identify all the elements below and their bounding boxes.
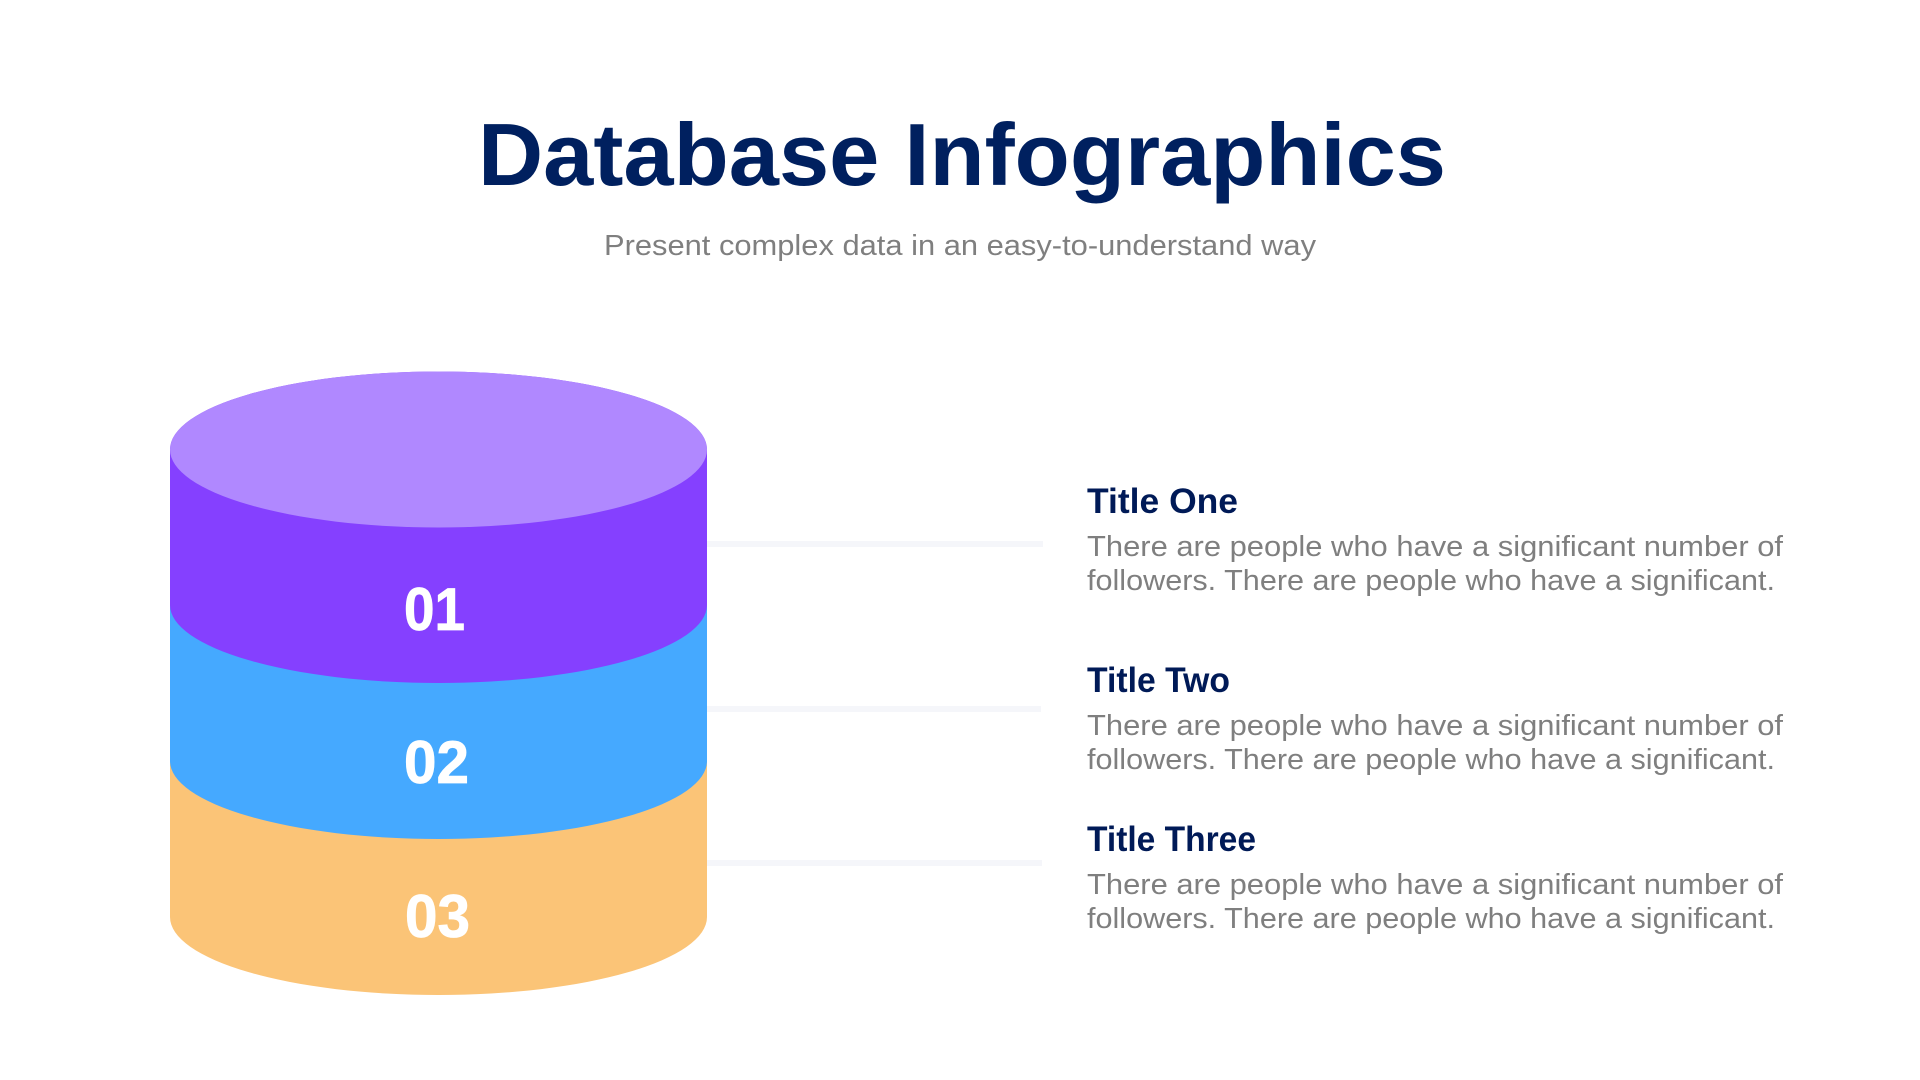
layer 02: 02 (404, 729, 469, 796)
subtitle: Present complex data in an easy-to-understand way (604, 230, 1317, 262)
text block: title three: Title Three (1087, 820, 1256, 859)
text block: title two: followers. There are people who have a significant. (1087, 744, 1775, 776)
cylinder top (170, 372, 707, 528)
connector line: three (705, 860, 1042, 866)
layer 01 (170, 372, 707, 683)
text block: title one: Title One (1087, 482, 1238, 521)
text block: title three: There are people who have a significant number of (1087, 869, 1784, 901)
layer 02 (170, 528, 707, 839)
text block: title three (1087, 820, 1784, 935)
connector line: one (707, 541, 1043, 547)
text block: title two (1087, 661, 1784, 776)
text block: title one (1087, 482, 1784, 597)
connector line: two (705, 706, 1041, 712)
layer 01: 01 (404, 576, 465, 643)
layer 03: 03 (405, 883, 470, 950)
chart: database cylinder (170, 372, 707, 995)
title: Database Infographics (478, 105, 1446, 204)
text block: title three: followers. There are people who have a significant. (1087, 903, 1775, 935)
text block: title one: There are people who have a significant number of (1087, 531, 1784, 563)
text block: title two: Title Two (1087, 661, 1230, 700)
text block: title one: followers. There are people who have a significant. (1087, 565, 1775, 597)
text block: title two: There are people who have a significant number of (1087, 710, 1784, 742)
layer 03 (170, 683, 707, 995)
